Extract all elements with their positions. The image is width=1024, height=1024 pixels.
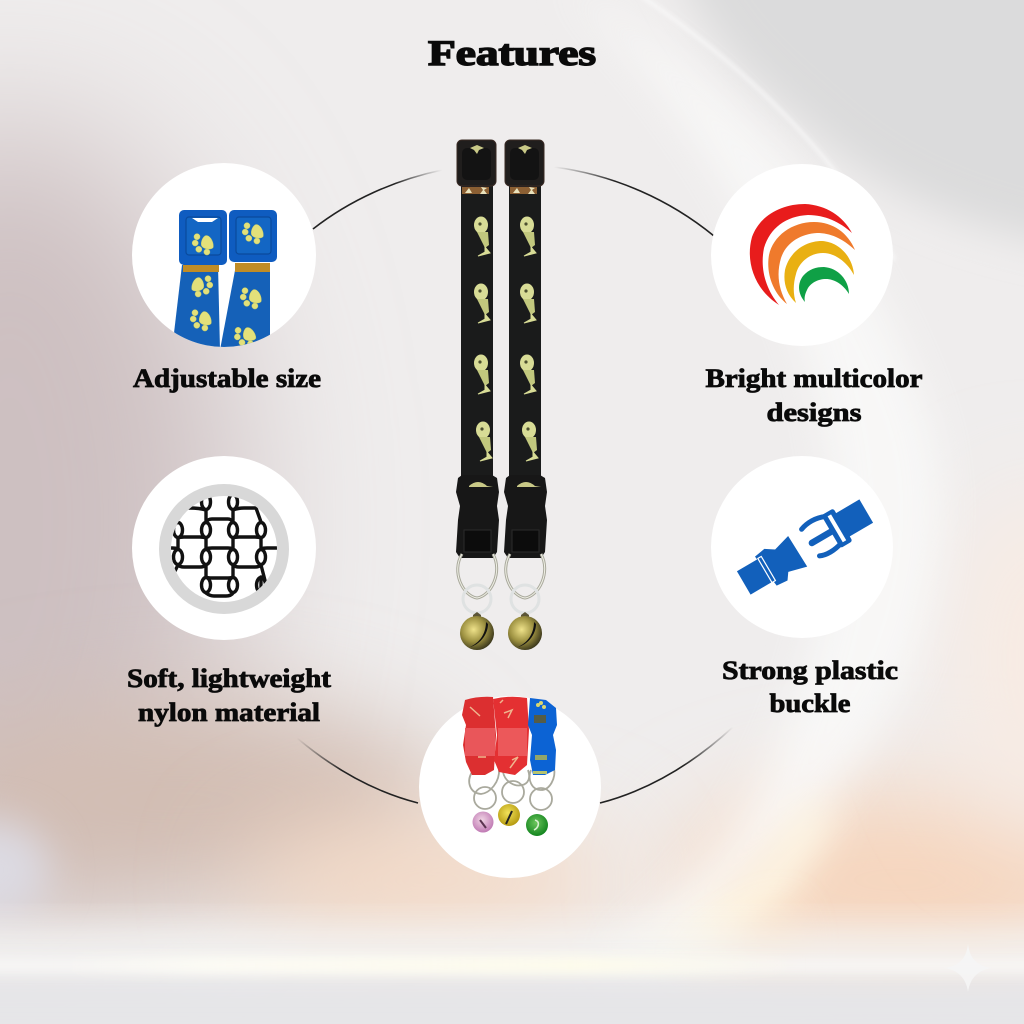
label: nylon material: Soft, lightweight (127, 664, 331, 693)
icon: blue buckle (528, 698, 557, 775)
icon: mesh (171, 496, 277, 598)
panel: colored collars (419, 696, 601, 878)
label: bright multicolor designs (706, 364, 922, 427)
label: adjustable size: Adjustable size (133, 364, 321, 393)
product: right black collar (504, 140, 547, 650)
icon: rainbow (750, 204, 855, 305)
label: nylon material: nylon material (138, 698, 320, 727)
icon: bells (472, 804, 548, 836)
icon: red buckles (462, 697, 529, 775)
panel: plastic buckle (711, 456, 893, 638)
label: bright multicolor designs: designs (766, 398, 862, 427)
label: strong plastic buckle: buckle (770, 689, 850, 718)
connector: top right (554, 167, 714, 236)
title: Features (428, 33, 596, 73)
label: bright multicolor designs: Bright multicolor (706, 364, 922, 393)
product: left black collar (456, 140, 499, 650)
icon: sparkle (944, 944, 992, 992)
panel: nylon material (132, 456, 316, 640)
panel: bright multicolor (711, 164, 893, 346)
label: strong plastic buckle: Strong plastic (722, 656, 898, 685)
connector: bottom left (297, 738, 418, 803)
icon: buckle (734, 495, 876, 600)
label: strong plastic buckle (722, 656, 898, 718)
panel: adjustable size (132, 163, 316, 350)
connector: top left (313, 170, 442, 229)
connector: bottom right (600, 727, 733, 803)
icon: rings (469, 768, 554, 810)
label: nylon material (127, 664, 331, 727)
icon: blue collars (172, 210, 277, 350)
